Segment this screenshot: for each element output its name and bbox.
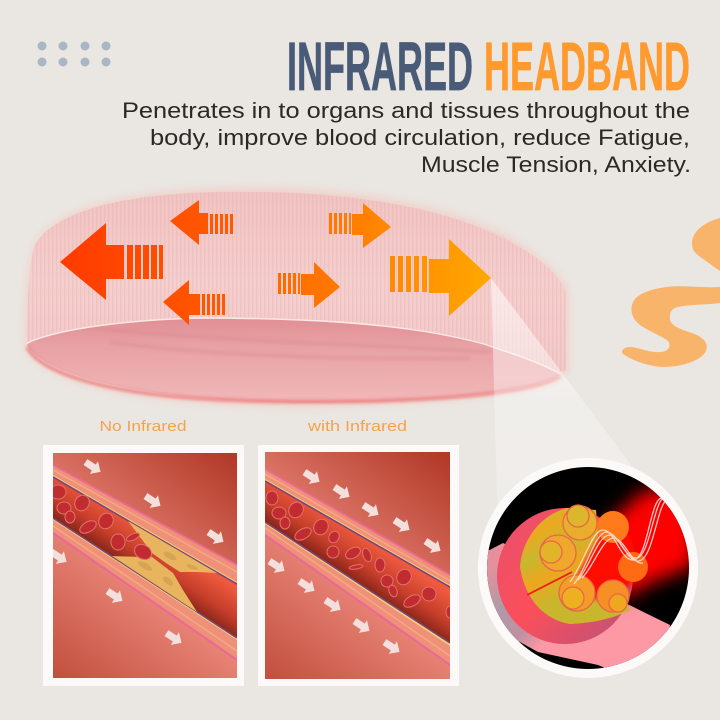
inner band fold <box>70 325 490 358</box>
label: No Infrared: No Infrared <box>100 418 186 435</box>
outer band <box>27 192 566 373</box>
magnified circle: nerve bundle <box>478 458 700 690</box>
pink skin layer <box>487 543 670 668</box>
band lower edge highlight <box>27 318 559 373</box>
arrow: large right <box>390 239 491 316</box>
inner band bottom edge <box>27 347 560 402</box>
fibre ends <box>540 505 629 612</box>
rear fibres <box>597 511 629 543</box>
inner band <box>27 318 559 403</box>
beam core <box>577 535 640 600</box>
red infrared beam <box>600 490 695 600</box>
arrow: large left <box>60 223 163 300</box>
plaque upper <box>128 521 217 573</box>
description text: body, improve blood circulation, reduce Fatigue, <box>150 125 690 150</box>
zoom beam <box>491 278 680 530</box>
arrow: upper right <box>329 203 391 248</box>
headband <box>27 190 566 404</box>
light waves <box>570 498 665 584</box>
arrow: centre right <box>278 262 340 308</box>
headband red glow <box>28 190 566 404</box>
red blood cells <box>266 491 454 618</box>
decorative orange swirl <box>622 218 720 367</box>
label: with Infrared: with Infrared <box>307 418 407 435</box>
title: INFRARED <box>287 28 473 105</box>
decorative dot grid <box>38 42 110 66</box>
plaque mottling <box>138 552 198 586</box>
plaque lower <box>112 556 197 612</box>
arrow: upper left <box>170 200 233 245</box>
red fibre line <box>527 572 572 595</box>
description text: Penetrates in to organs and tissues throughout the <box>122 98 690 123</box>
description text <box>122 98 691 177</box>
flow arrows <box>47 456 228 649</box>
artery walls <box>265 469 450 665</box>
panel: no infrared artery <box>43 445 244 686</box>
yellow fibre bundle <box>520 508 630 624</box>
band ribbing <box>27 192 566 373</box>
panel: with infrared artery <box>258 445 459 686</box>
red blood cells <box>50 485 154 563</box>
arrow: lower left <box>163 280 225 325</box>
flow arrows <box>265 466 445 658</box>
red disk <box>497 508 633 644</box>
description text: Muscle Tension, Anxiety. <box>421 152 691 177</box>
artery walls <box>53 465 237 660</box>
